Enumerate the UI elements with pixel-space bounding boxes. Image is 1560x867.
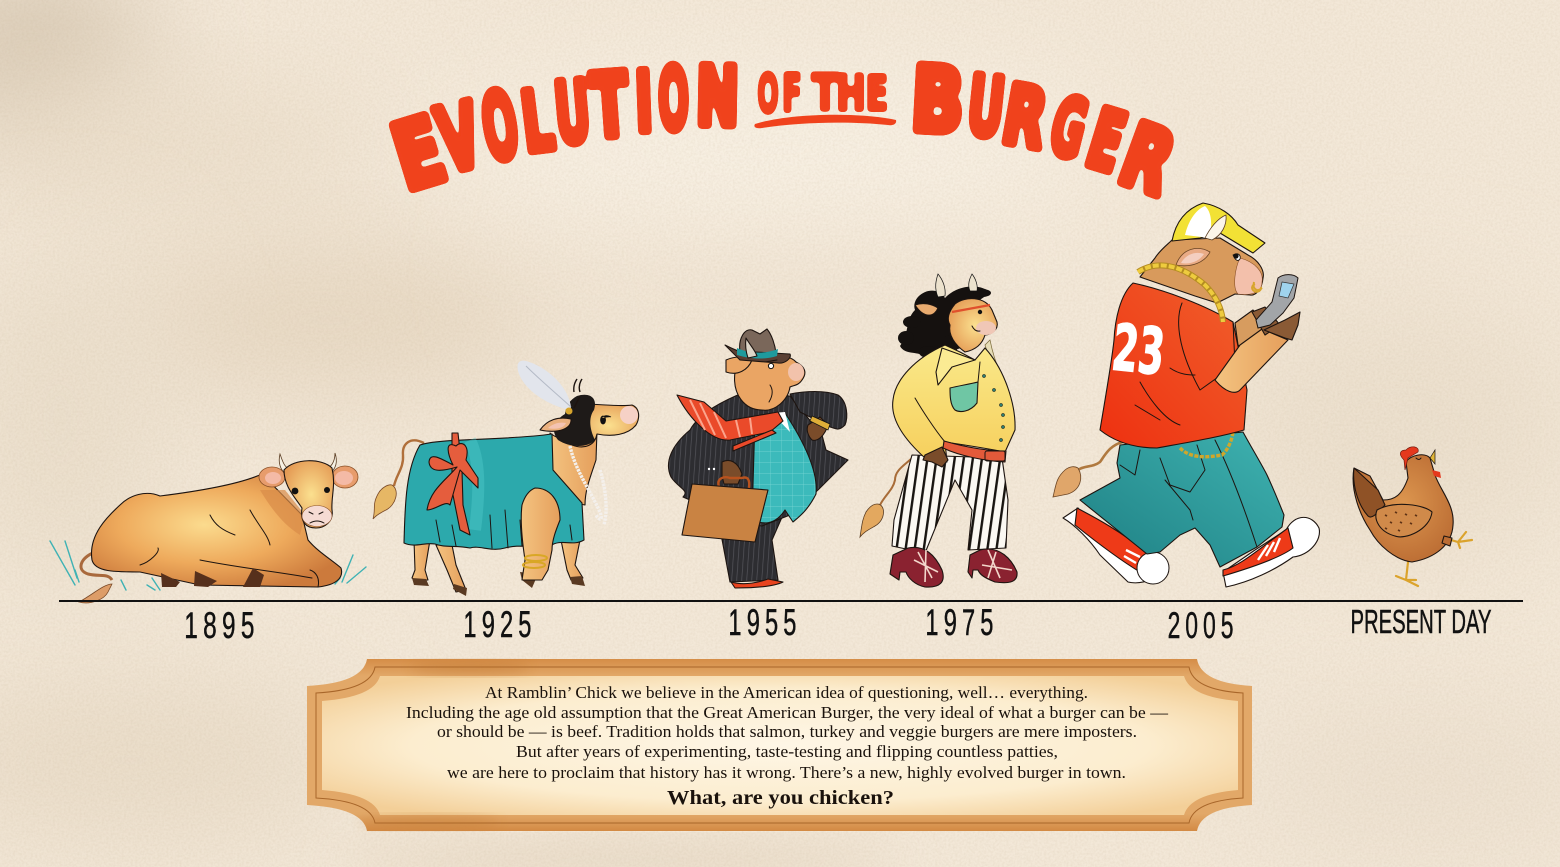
title: Evolution of the Burger: N — [695, 49, 740, 146]
title: Evolution of the Burger: G — [1041, 80, 1096, 179]
title: Evolution of the Burger: R — [1107, 103, 1187, 216]
title: Evolution of the Burger: O — [475, 71, 525, 182]
title: Evolution of the Burger — [381, 47, 1187, 216]
title: Evolution of the Burger: E — [1077, 91, 1136, 191]
message text: At Ramblin’ Chick we believe in the American idea of questioning, well… everything. — [485, 683, 1088, 702]
message text — [406, 683, 1169, 809]
cow 1895: lying in grass — [50, 453, 366, 603]
title: Evolution of the Burger: B — [909, 47, 967, 154]
title: Evolution of the Burger: F — [782, 63, 802, 123]
message text: What, are you chicken? — [667, 787, 894, 809]
cow 1955: businessman — [668, 329, 848, 588]
message text: But after years of experimenting, taste-testing and flipping countless patties, — [516, 742, 1058, 761]
title: Evolution of the Burger: U — [963, 58, 1009, 157]
cow 2005: hip-hop style — [1053, 203, 1319, 587]
year label: 1895: 1895 — [184, 605, 260, 646]
title: Evolution of the Burger: R — [996, 67, 1054, 168]
panel: Ramblin' Chick message — [307, 659, 1252, 831]
title: Evolution of the Burger: E — [866, 66, 888, 122]
title: Evolution of the Burger: O — [757, 62, 779, 125]
year label: 1925: 1925 — [463, 604, 537, 645]
chicken: present day — [1353, 447, 1472, 586]
cow 1925: flapper dress — [373, 361, 639, 596]
jersey number: 23 — [1109, 311, 1168, 390]
title: Evolution of the Burger: E — [381, 97, 457, 212]
title: Evolution of the Burger: I — [634, 55, 655, 152]
timeline — [59, 600, 1523, 602]
message text: Including the age old assumption that the Great American Burger, the very ideal of what a burger can be — — [406, 703, 1169, 722]
title: Evolution of the Burger: T — [812, 65, 839, 122]
title: Evolution of the Burger: H — [836, 66, 866, 123]
year label: 1975: 1975 — [925, 602, 999, 643]
message text: or should be — is beef. Tradition holds that salmon, turkey and veggie burgers are mere imposters. — [437, 722, 1137, 741]
message text: we are here to proclaim that history has it wrong. There’s a new, highly evolved burger in town. — [447, 763, 1126, 782]
title: Evolution of the Burger: L — [516, 72, 559, 172]
year label: 2005: 2005 — [1168, 604, 1238, 646]
cow 1975: hippie — [860, 274, 1017, 587]
title: Evolution of the Burger: V — [428, 84, 491, 194]
year label: 1955: 1955 — [728, 602, 802, 643]
title: Evolution of the Burger: O — [657, 49, 690, 150]
title: Evolution of the Burger: U — [551, 61, 594, 164]
title: Evolution of the Burger: T — [588, 54, 632, 159]
